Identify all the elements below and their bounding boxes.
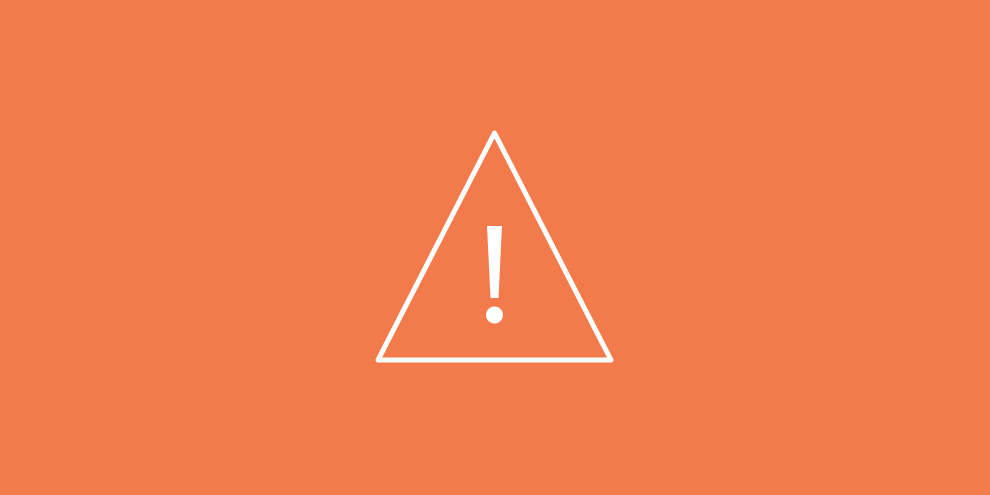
triangle outline <box>378 133 611 360</box>
exclamation mark <box>486 226 503 324</box>
